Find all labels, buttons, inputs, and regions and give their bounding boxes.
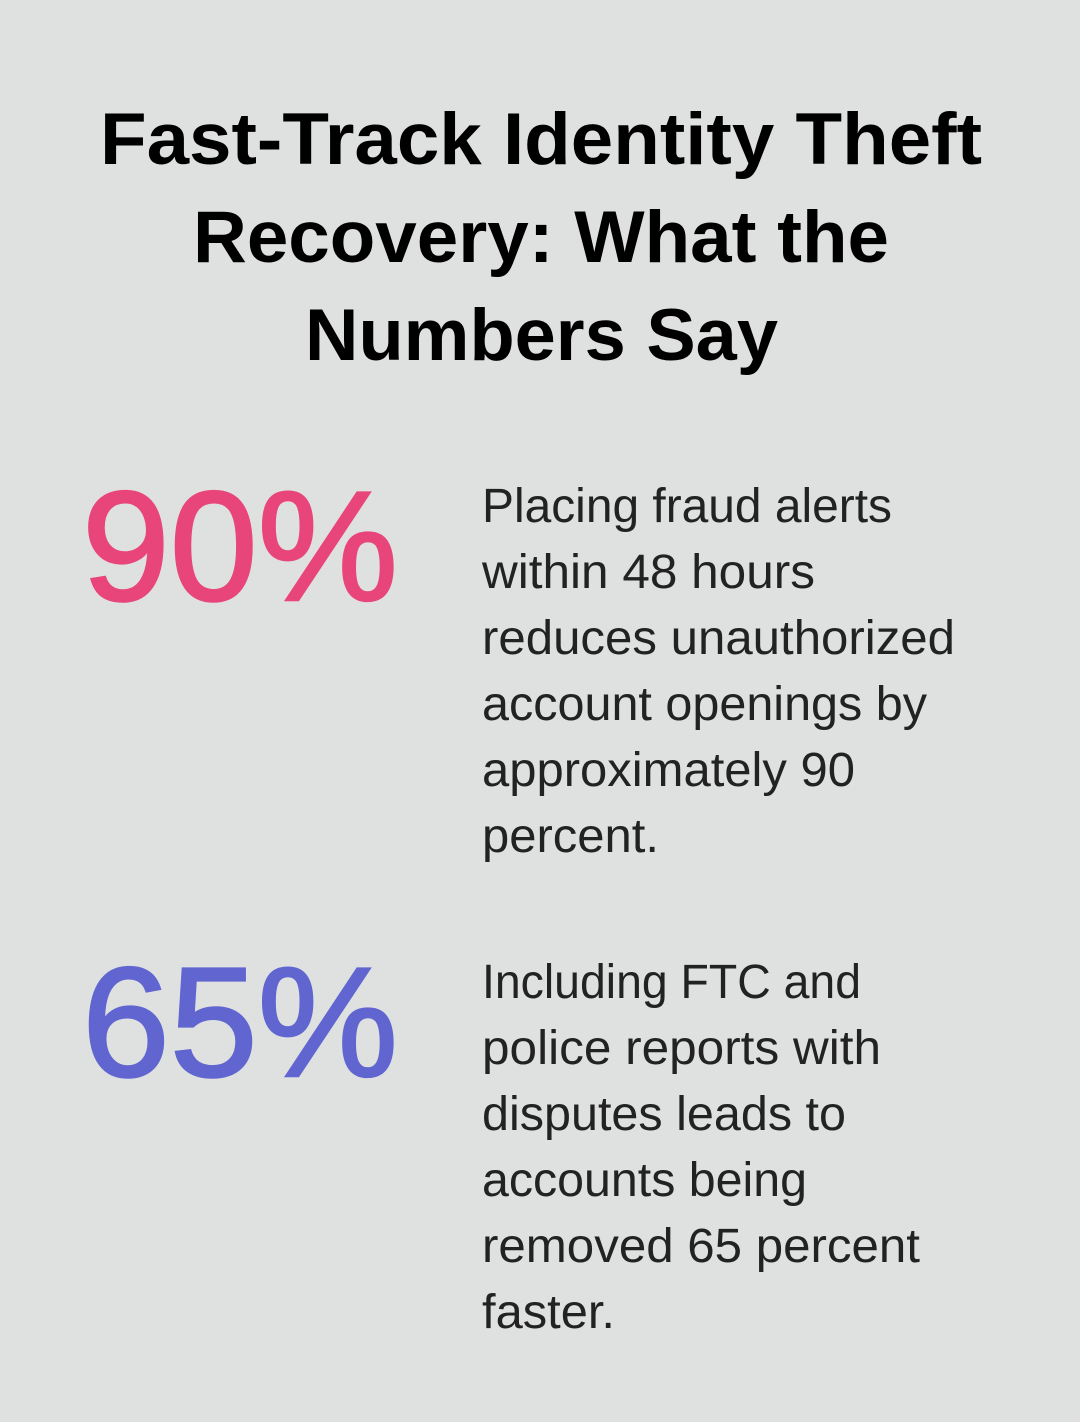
title: Recovery: What the — [193, 197, 889, 278]
text block: FTC and police reports: police reports with — [482, 1022, 881, 1075]
text block: fraud alerts: reduces unauthorized — [482, 612, 955, 665]
text block: FTC and police reports: accounts being — [482, 1154, 807, 1207]
text block: FTC and police reports: Including FTC and — [482, 956, 861, 1009]
text block: FTC and police reports: removed 65 percent — [482, 1220, 920, 1273]
text block: fraud alerts: account openings by — [482, 678, 927, 731]
statistic: 90 percent: 90% — [82, 460, 398, 634]
text block: fraud alerts — [481, 480, 955, 863]
text block: FTC and police reports — [482, 956, 920, 1339]
title — [100, 99, 982, 376]
text block: FTC and police reports: faster. — [482, 1286, 615, 1339]
title: Numbers Say — [305, 295, 778, 376]
text block: fraud alerts: Placing fraud alerts — [482, 480, 892, 533]
text block: fraud alerts: within 48 hours — [481, 546, 815, 599]
statistic: 65 percent: 65% — [82, 936, 398, 1110]
text block: FTC and police reports: disputes leads to — [482, 1088, 846, 1141]
text block: fraud alerts: percent. — [482, 810, 659, 863]
title: Fast-Track Identity Theft — [100, 99, 982, 180]
text block: fraud alerts: approximately 90 — [482, 744, 855, 797]
